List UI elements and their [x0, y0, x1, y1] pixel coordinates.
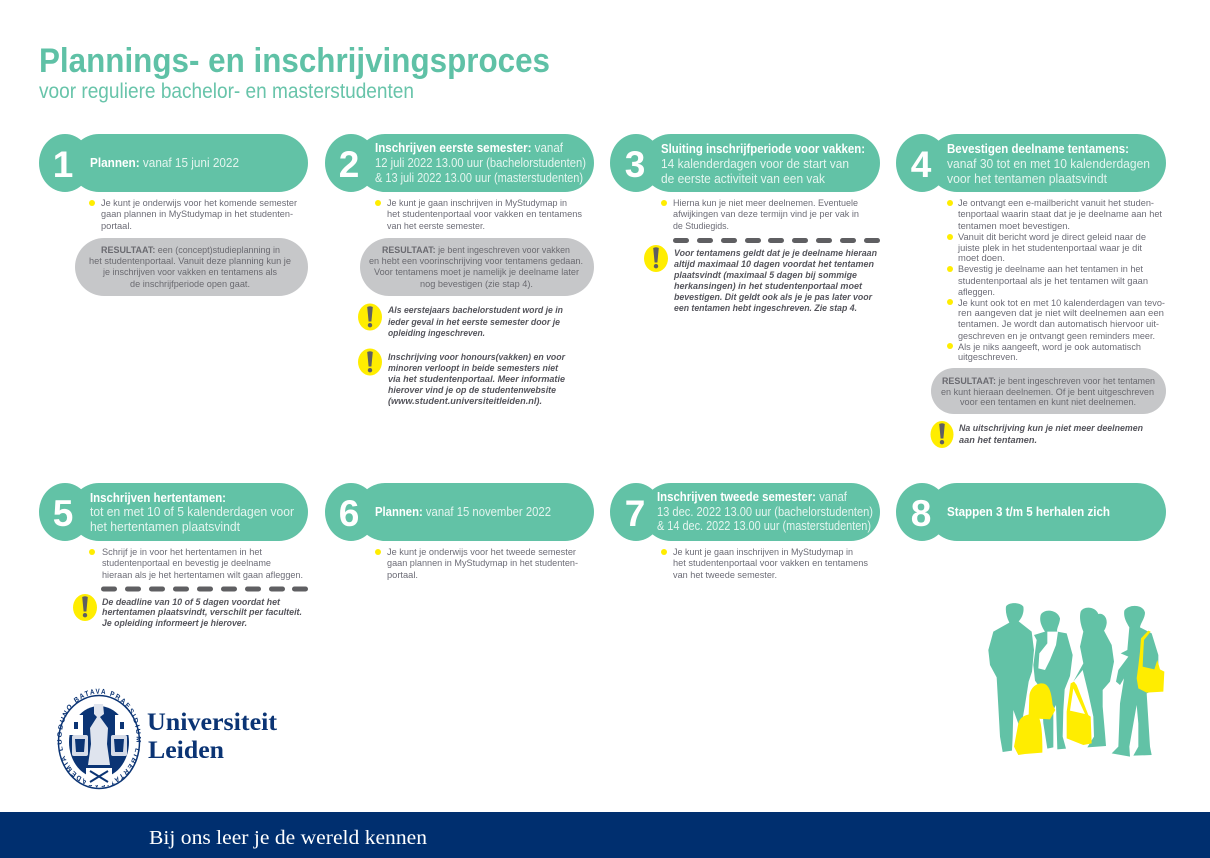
students silhouette illustration — [988, 603, 1164, 757]
step 2 result — [360, 238, 594, 296]
step 5 heading pill: 5 — [53, 493, 73, 534]
step 1 result: je inschrijven voor vakken en tentamens als — [102, 267, 277, 278]
step 5 panel — [39, 483, 308, 629]
step 7 bullet text — [661, 547, 868, 581]
step 2 warning 2: hierover vind je op de studentenwebsite — [388, 385, 557, 396]
step 4 panel — [896, 134, 1166, 448]
step 7 bullet text: het studentenportaal voor vakken en tentamens — [673, 558, 868, 569]
step 5 bullet text: hieraan als je het hertentamen wilt gaan afleggen. — [102, 570, 303, 581]
step 2 heading pill: & 13 juli 2022 13.00 uur (masterstudenten) — [375, 171, 583, 185]
step 5 heading pill: tot en met 10 of 5 kalenderdagen voor — [90, 505, 294, 519]
step 6 heading pill: 6 — [339, 493, 359, 534]
step 1 bullet text: Je kunt je onderwijs voor het komende semester — [101, 198, 297, 209]
step 3 heading pill: de eerste activiteit van een vak — [661, 172, 826, 186]
step 4 heading pill — [896, 134, 1166, 192]
step 3 warning: plaatsvindt (maximaal 5 dagen bij sommige — [673, 270, 858, 281]
yellow bags — [1014, 631, 1164, 755]
step 3 bullet text: de Studiegids. — [673, 221, 729, 232]
step 4 bullet list: Je ontvangt een e-mailbericht vanuit het studen- — [958, 198, 1154, 209]
step 1 heading pill: 1 — [53, 144, 73, 185]
step 8 panel: 8 — [911, 493, 931, 534]
step 6 panel — [325, 483, 594, 581]
person 4 — [1112, 606, 1158, 757]
step 2 bullet text: het studentenportaal voor vakken en tentamens — [387, 209, 582, 220]
footer slogan: Bij ons leer je de wereld kennen — [149, 827, 427, 849]
step 3 bullet text — [661, 198, 859, 232]
step 6 bullet text: gaan plannen in MyStudymap in het studenten- — [387, 558, 578, 569]
step 2 warning 1: Als eerstejaars bachelorstudent word je in — [387, 305, 563, 316]
step 4 warning: Na uitschrijving kun je niet meer deelnemen — [959, 423, 1143, 434]
step 5 bullet text: studentenportaal en bevestig je deelname — [102, 558, 271, 569]
university wordmark — [147, 709, 278, 764]
step 1 result: de inschrijfperiode open gaat. — [130, 279, 250, 290]
step 2 warning 1: opleiding ingeschreven. — [388, 328, 485, 339]
step 5 bullet text: Schrijf je in voor het hertentamen in het — [102, 547, 262, 558]
step 4 result: en kunt hieraan deelnemen. Of je bent uitgeschreven — [941, 387, 1154, 398]
step 2 bullet text: van het eerste semester. — [387, 221, 485, 232]
step 5 warning: De deadline van 10 of 5 dagen voordat het — [102, 597, 281, 608]
step 5 bullet text — [89, 547, 303, 581]
step 5 warning — [73, 594, 302, 629]
step 2 result: nog bevestigen (zie stap 4). — [420, 279, 533, 290]
step 2 bullet text: Je kunt je gaan inschrijven in MyStudymap in — [387, 198, 567, 209]
step 8 panel — [896, 483, 1166, 541]
step 4 bullet list — [947, 198, 1165, 363]
step 2 result: RESULTAAT: je bent ingeschreven voor vakken — [382, 245, 570, 256]
step 2 warning 2: Inschrijving voor honours(vakken) en voor — [388, 352, 566, 363]
step 3 warning: bevestigen. Dit geldt ook als je je pas later voor — [674, 292, 873, 303]
footer band — [0, 812, 1210, 858]
step 1 result — [75, 238, 308, 296]
step 3 warning: herkansingen) in het studentenportaal moet — [674, 281, 863, 292]
step 3 heading pill — [610, 134, 880, 192]
step 7 heading pill: 13 dec. 2022 13.00 uur (bachelorstudenten) — [657, 505, 873, 519]
step 2 warning 2: (www.student.universiteitleiden.nl). — [388, 396, 542, 407]
step 2 heading pill: 2 — [339, 144, 359, 185]
step 2 warning 2 — [358, 348, 566, 407]
step 2 warning 1: ieder geval in het eerste semester door je — [388, 317, 561, 328]
step 6 bullet text: Je kunt je onderwijs voor het tweede semester — [387, 547, 576, 558]
step 4 heading pill: vanaf 30 tot en met 10 kalenderdagen — [947, 157, 1150, 171]
step 6 heading pill — [325, 483, 594, 541]
step 3 warning: een tentamen hebt ingeschreven. Zie stap 4. — [674, 303, 857, 314]
step 7 heading pill — [610, 483, 880, 541]
step 3 warning — [644, 245, 877, 314]
step 5 warning: Je opleiding informeert je hierover. — [102, 618, 247, 629]
step 7 heading pill: & 14 dec. 2022 13.00 uur (masterstudenten) — [657, 519, 871, 533]
step 4 bullet list: Als je niks aangeeft, word je ook automatisch — [958, 342, 1141, 353]
step 8 panel: Stappen 3 t/m 5 herhalen zich — [947, 505, 1110, 519]
step 4 warning — [930, 421, 1143, 448]
step 2 bullet text — [375, 198, 582, 232]
step 1 bullet text — [89, 198, 297, 232]
person 1 — [988, 603, 1034, 752]
step 4 bullet list: tenportaal waarin staat dat je je deelname aan het — [958, 209, 1162, 220]
university wordmark: Universiteit — [147, 709, 278, 736]
seal circular inscription: ACADEMIA LUGDUNO BATAVA PRAESIDIUM LIBERTATIS — [57, 688, 141, 788]
step 5 heading pill: Inschrijven hertentamen: — [90, 491, 226, 505]
step 4 bullet list: Bevestig je deelname aan het tentamen in het — [958, 264, 1143, 275]
step 2 result: en hebt een voorinschrijving voor tentamens gedaan. — [369, 256, 583, 267]
step 1 bullet text: portaal. — [101, 221, 132, 232]
step 4 bullet list: Vanuit dit bericht word je direct geleid naar de — [958, 232, 1146, 243]
step 2 result: Voor tentamens moet je namelijk je deelname later — [374, 267, 579, 278]
university seal logo — [57, 688, 141, 790]
step 2 warning 1 — [358, 304, 563, 339]
step 1 result: het studentenportaal. Vanuit deze planning kun je — [89, 256, 291, 267]
university wordmark: Leiden — [148, 737, 224, 764]
title: Plannings- en inschrijvingsproces — [39, 42, 550, 80]
step 4 result: voor een tentamen en kunt niet deelnemen. — [960, 397, 1136, 408]
step 4 bullet list: moet doen. — [958, 253, 1005, 264]
step 4 bullet list: studentenportaal als je het tentamen wilt gaan — [958, 276, 1148, 287]
step 4 bullet list: geschreven en je ontvangt geen reminders meer. — [958, 331, 1155, 342]
step 1 heading pill — [39, 134, 308, 192]
step 6 heading pill: Plannen: vanaf 15 november 2022 — [375, 505, 551, 519]
step 4 result: RESULTAAT: je bent ingeschreven voor het tentamen — [942, 376, 1155, 387]
step 1 heading pill: Plannen: vanaf 15 juni 2022 — [90, 156, 239, 170]
step 2 heading pill: 12 juli 2022 13.00 uur (bachelorstudenten) — [375, 156, 586, 170]
step 4 heading pill: Bevestigen deelname tentamens: — [947, 142, 1129, 156]
step 1 panel — [39, 134, 308, 296]
step 4 bullet list: Je kunt ook tot en met 10 kalenderdagen van tevo- — [958, 298, 1165, 309]
step 7 heading pill: 7 — [625, 493, 645, 534]
step 2 heading pill — [325, 134, 594, 192]
step 3 heading pill: 14 kalenderdagen voor de start van — [661, 157, 849, 171]
step 6 bullet text: portaal. — [387, 570, 418, 581]
step 4 bullet list: juiste plek in het studentenportaal waar je dit — [957, 243, 1142, 254]
step 7 bullet text: Je kunt je gaan inschrijven in MyStudymap in — [673, 547, 853, 558]
step 2 warning 2: minoren verloopt in beide semesters niet — [388, 363, 559, 374]
subtitle: voor reguliere bachelor- en masterstudenten — [39, 80, 414, 103]
person 2 — [1033, 611, 1073, 749]
step 4 bullet list: tentamen. Je wordt dan automatisch hiervoor uit- — [958, 319, 1159, 330]
step 3 panel — [610, 134, 880, 314]
step 3 warning: Voor tentamens geldt dat je je deelname hieraan — [674, 248, 877, 259]
step 4 bullet list: ren aangeven dat je niet wilt deelnemen aan een — [958, 308, 1164, 319]
step 5 heading pill: het hertentamen plaatsvindt — [90, 520, 240, 534]
step 3 heading pill: 3 — [625, 144, 645, 185]
step 4 heading pill: voor het tentamen plaatsvindt — [947, 172, 1108, 186]
person 3 — [1073, 608, 1114, 747]
step 4 bullet list: uitgeschreven. — [958, 352, 1018, 363]
step 3 bullet text: Hierna kun je niet meer deelnemen. Eventuele — [673, 198, 858, 209]
step 5 warning: hertentamen plaatsvindt, verschilt per faculteit. — [102, 607, 302, 618]
step 2 heading pill: Inschrijven eerste semester: vanaf — [375, 141, 563, 155]
step 4 result — [931, 368, 1166, 414]
step 3 bullet text: afwijkingen van deze termijn vind je per vak in — [673, 209, 859, 220]
step 7 bullet text: van het tweede semester. — [673, 570, 777, 581]
step 5 heading pill — [39, 483, 308, 541]
step 4 bullet list: afleggen. — [958, 287, 995, 298]
step 2 panel — [325, 134, 594, 407]
person 2 scarf — [1038, 632, 1058, 670]
step 7 panel — [610, 483, 880, 581]
step 2 warning 2: via het studentenportaal. Meer informatie — [388, 374, 566, 385]
step 1 bullet text: gaan plannen in MyStudymap in het studenten- — [101, 209, 293, 220]
step 6 bullet text — [375, 547, 578, 581]
step 3 heading pill: Sluiting inschrijfperiode voor vakken: — [661, 142, 865, 156]
step 1 result: RESULTAAT: een (concept)studieplanning in — [101, 245, 280, 256]
step 4 bullet list: tentamen moet bevestigen. — [958, 221, 1070, 232]
step 7 heading pill: Inschrijven tweede semester: vanaf — [657, 490, 847, 504]
step 4 heading pill: 4 — [911, 144, 932, 185]
step 4 warning: aan het tentamen. — [959, 435, 1037, 446]
step 3 warning: altijd maximaal 10 dagen voordat het tentamen — [674, 259, 874, 270]
